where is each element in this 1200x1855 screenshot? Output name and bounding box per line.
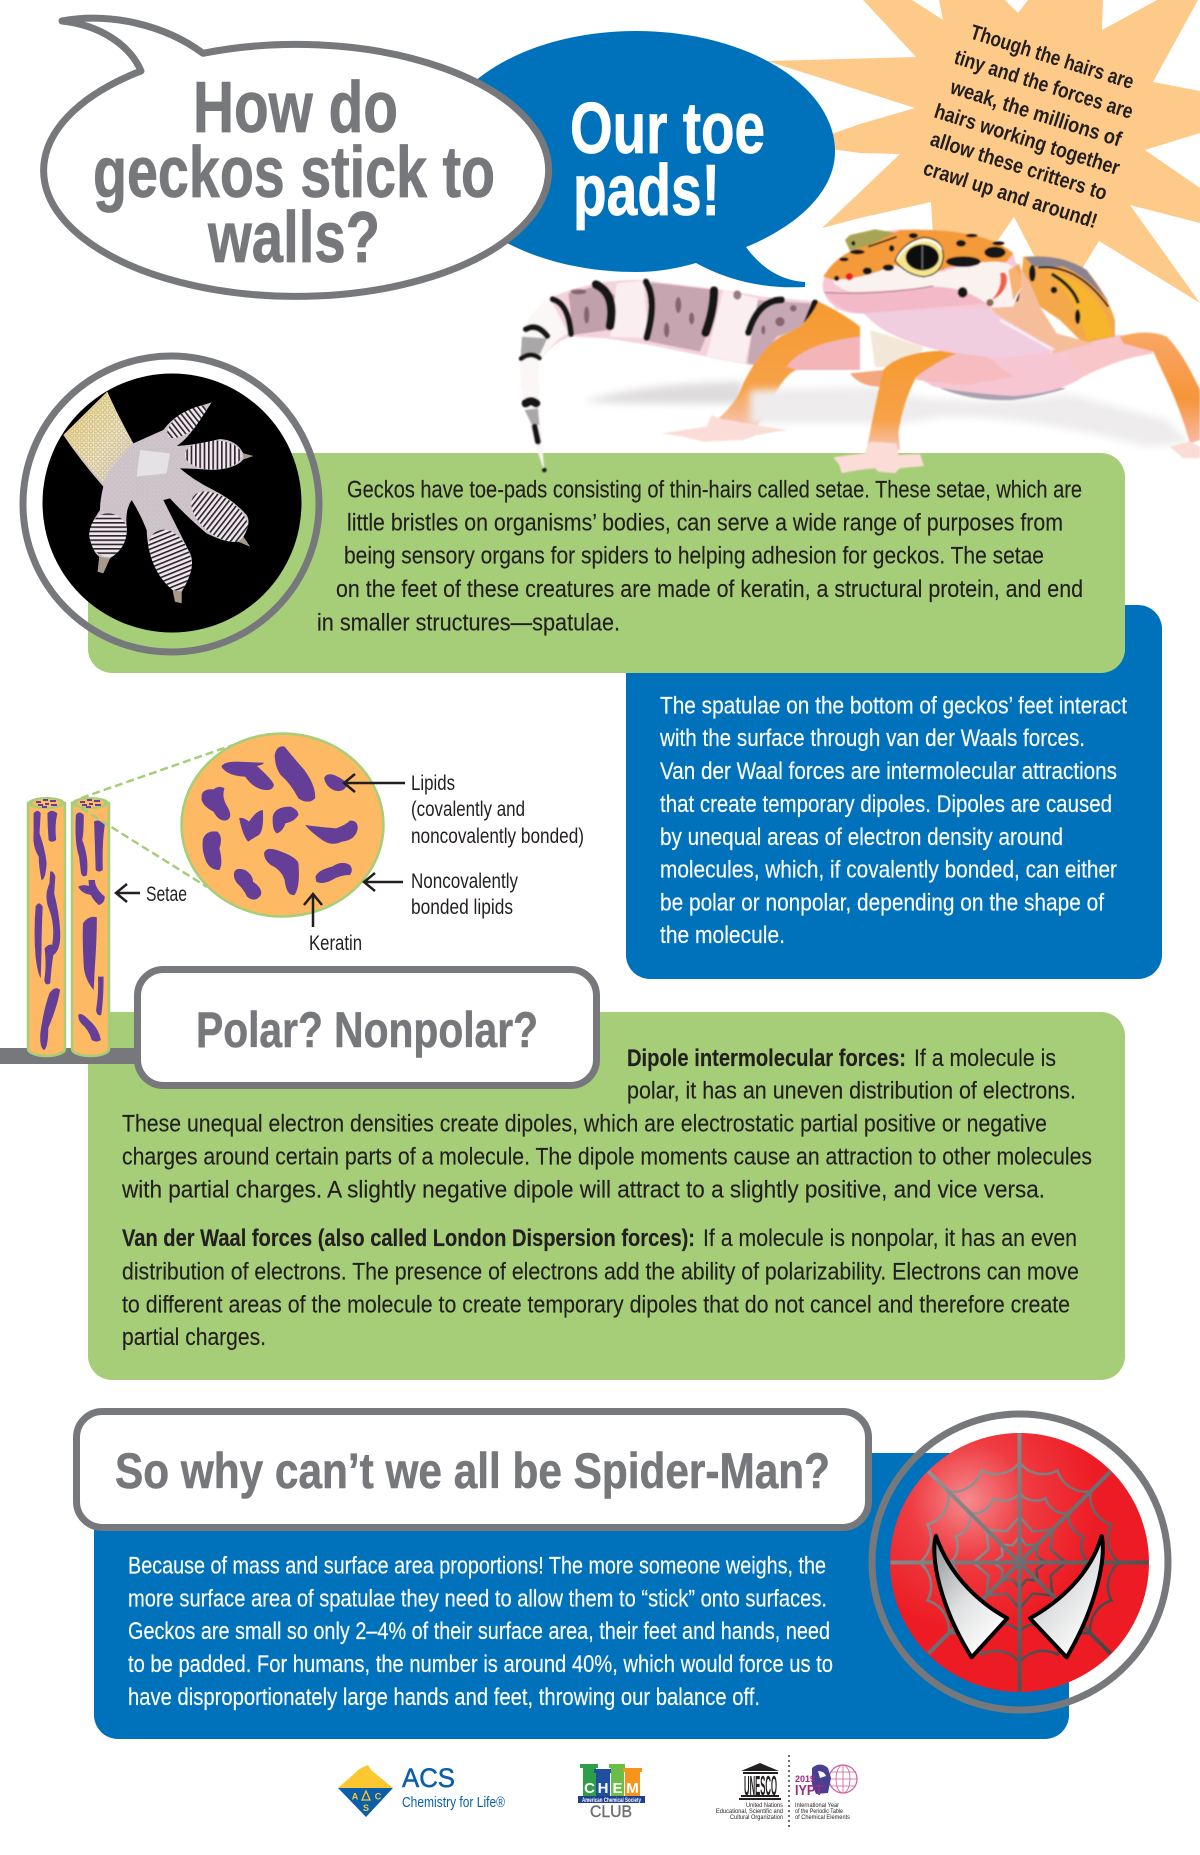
logo: ACS Chemistry for Life: Chemistry for Life® <box>402 1794 505 1811</box>
label: setae: Setae <box>146 883 187 906</box>
right seta cylinder <box>72 797 109 1056</box>
logo: ACS Chemistry for Life <box>338 1763 505 1817</box>
gecko photo illustration <box>521 229 1200 473</box>
text: setae explanation: in smaller structures—spatulae. <box>317 610 620 636</box>
text: dipole intermolecular forces: polar, it has an uneven distribution of electrons. <box>627 1078 1076 1104</box>
arrow: lipids <box>344 774 405 792</box>
label: noncovalently bonded lipids: bonded lipids <box>411 896 513 919</box>
starburst callout text: weak, the millions of <box>947 76 1125 152</box>
logo: ChemClub: CLUB <box>590 1802 632 1821</box>
text: van der Waal forces <box>122 1225 1079 1351</box>
logo: UNESCO and IYPT 2019: International Year <box>795 1803 839 1809</box>
text: van der Waal forces: If a molecule is nonpolar, it has an even <box>703 1225 1077 1252</box>
text: dipole intermolecular forces: with partial charges. A slightly negative dipole will attract to a slightly positive, and vice versa. <box>121 1176 1045 1204</box>
arrow: noncovalently bonded lipids <box>364 873 403 891</box>
title: How do geckos stick to walls?: walls? <box>207 198 380 278</box>
gecko head, body and front legs <box>750 229 1200 473</box>
heading box: So why can't we all be Spider-Man? <box>76 1412 868 1528</box>
heading box: Polar? Nonpolar? <box>138 970 596 1086</box>
logo: UNESCO and IYPT 2019: UNESCO <box>744 1770 777 1801</box>
logo: UNESCO and IYPT 2019: Cultural Organization <box>730 1815 783 1821</box>
logo: ACS Chemistry for Life: A <box>352 1792 359 1802</box>
logo: UNESCO and IYPT 2019: of Chemical Elements <box>795 1815 850 1821</box>
text: spatulae and van der Waals explanation: be polar or nonpolar, depending on the shape of <box>660 890 1104 916</box>
label: keratin: Keratin <box>309 932 362 955</box>
gray question speech bubble <box>44 18 549 296</box>
left seta cylinder <box>28 797 65 1056</box>
arrow: setae <box>116 884 140 902</box>
text: van der Waal forces: partial charges. <box>122 1324 266 1351</box>
heading box: So why can't we all be Spider-Man?: So why can’t we all be Spider-Man? <box>115 1443 830 1499</box>
gray ledge <box>0 1048 145 1064</box>
starburst callout text <box>920 21 1137 233</box>
gecko tail and rear body <box>521 280 860 472</box>
logo: ChemClub: M <box>626 1780 639 1797</box>
logo: UNESCO and IYPT 2019: Educational, Scientific and <box>716 1809 783 1815</box>
logo: ChemClub: C <box>584 1780 595 1797</box>
text: setae explanation: little bristles on organisms’ bodies, can serve a wide range of purposes from <box>347 510 1063 536</box>
title: How do geckos stick to walls?: geckos stick to <box>93 133 495 213</box>
label: lipids <box>411 772 584 848</box>
logo: UNESCO and IYPT 2019: IYPT <box>795 1782 823 1799</box>
text: Spider-Man explanation: have disproportionately large hands and feet, throwing our balance off. <box>128 1684 760 1711</box>
logo: UNESCO and IYPT 2019: of the Periodic Table <box>795 1809 844 1815</box>
logo: ACS Chemistry for Life: C <box>375 1792 382 1802</box>
text: spatulae and van der Waals explanation: with the surface through van der Waals forces. <box>659 725 1085 752</box>
logo: ChemClub <box>578 1764 645 1821</box>
zoom guide lines <box>81 745 233 887</box>
starburst callout text: hairs working together <box>931 100 1122 180</box>
text: Spider-Man explanation: to be padded. For humans, the number is around 40%, which would force us to <box>128 1651 833 1678</box>
text: spatulae and van der Waals explanation: by unequal areas of electron density around <box>660 824 1063 851</box>
logo: ChemClub: American Chemical Society <box>582 1798 641 1804</box>
text: dipole intermolecular forces: Dipole intermolecular forces: <box>627 1045 906 1072</box>
title: How do geckos stick to walls?: How do <box>193 68 398 148</box>
logo: UNESCO and IYPT 2019: United Nations <box>746 1803 783 1809</box>
text: setae explanation <box>317 476 1083 636</box>
label: lipids: (covalently and <box>411 798 525 821</box>
label: noncovalently bonded lipids: Noncovalently <box>411 870 518 893</box>
logo: ACS Chemistry for Life: S <box>363 1803 369 1813</box>
text: spatulae and van der Waals explanation: the molecule. <box>660 922 785 949</box>
heading box: Polar? Nonpolar?: Polar? Nonpolar? <box>196 1002 538 1058</box>
text: spatulae and van der Waals explanation: The spatulae on the bottom of geckos’ feet interact <box>660 692 1127 720</box>
text: setae explanation: being sensory organs for spiders to helping adhesion for geckos. The setae <box>344 542 1044 570</box>
panel: blue Spider-Man background <box>94 1453 1069 1739</box>
arrow: keratin <box>304 894 322 927</box>
blue answer speech bubble <box>438 31 835 287</box>
text: dipole intermolecular forces: If a molecule is <box>914 1045 1056 1072</box>
text: Spider-Man explanation: Because of mass and surface area proportions! The more someone weighs, the <box>128 1552 826 1580</box>
text: Spider-Man explanation: more surface area of spatulae they need to allow them to “stick” onto surfaces. <box>128 1586 827 1612</box>
text: van der Waal forces: to different areas of the molecule to create temporary dipoles that do not cancel and therefore create <box>122 1292 1070 1318</box>
panel: green setae background <box>88 453 1125 673</box>
title: How do geckos stick to walls? <box>93 68 495 278</box>
setae diagram <box>0 734 584 1064</box>
logo: UNESCO and IYPT 2019 <box>716 1755 857 1827</box>
text: spatulae and van der Waals explanation <box>659 692 1127 949</box>
logo: ChemClub: E <box>612 1780 623 1797</box>
text: dipole intermolecular forces: charges around certain parts of a molecule. The dipole moments cause an attraction to other molecules <box>122 1144 1092 1170</box>
label: lipids: Lipids <box>411 772 455 795</box>
text: dipole intermolecular forces <box>121 1045 1092 1204</box>
heading: Our toe pads!: pads! <box>573 151 720 231</box>
starburst callout text: allow these critters to <box>927 128 1110 205</box>
panel: green dipole background <box>88 1012 1125 1380</box>
text: dipole intermolecular forces: These unequal electron densities create dipoles, which are electrostatic partial positive or negative <box>122 1110 1047 1138</box>
cross section lipid blobs <box>202 746 358 900</box>
heading: Our toe pads! <box>570 89 765 231</box>
panel: blue spatulae background <box>626 605 1162 979</box>
logo: ACS Chemistry for Life: ACS <box>402 1763 455 1793</box>
text: spatulae and van der Waals explanation: molecules, which, if covalently bonded, can either <box>660 856 1117 884</box>
logo: ChemClub: H <box>598 1780 608 1797</box>
foot photo circle <box>23 356 319 652</box>
magnified cross section <box>182 734 384 916</box>
icon: Spider-Man mask <box>872 1414 1168 1710</box>
text: Spider-Man explanation: Geckos are small so only 2–4% of their surface area, their feet and hands, need <box>128 1618 830 1645</box>
logo: UNESCO and IYPT 2019: 2019 <box>795 1774 815 1785</box>
text: spatulae and van der Waals explanation: Van der Waal forces are intermolecular attractions <box>660 758 1117 785</box>
starburst callout background <box>767 0 1200 305</box>
starburst callout text: tiny and the forces are <box>951 46 1136 124</box>
label: noncovalently bonded lipids <box>411 870 518 919</box>
text: Spider-Man explanation <box>128 1552 833 1711</box>
text: van der Waal forces: Van der Waal forces (also called London Dispersion forces): <box>122 1225 695 1252</box>
heading: Our toe pads!: Our toe <box>570 89 765 169</box>
starburst callout text: crawl up and around! <box>920 157 1100 233</box>
text: van der Waal forces: distribution of electrons. The presence of electrons add the ability of polarizability. Electrons can move <box>122 1258 1079 1286</box>
text: spatulae and van der Waals explanation: that create temporary dipoles. Dipoles are caused <box>660 791 1112 818</box>
purple lipid strands <box>33 811 105 1050</box>
text: setae explanation: on the feet of these creatures are made of keratin, a structural protein, and end <box>336 576 1083 603</box>
label: lipids: noncovalently bonded) <box>411 825 584 848</box>
starburst callout text: Though the hairs are <box>967 21 1137 94</box>
